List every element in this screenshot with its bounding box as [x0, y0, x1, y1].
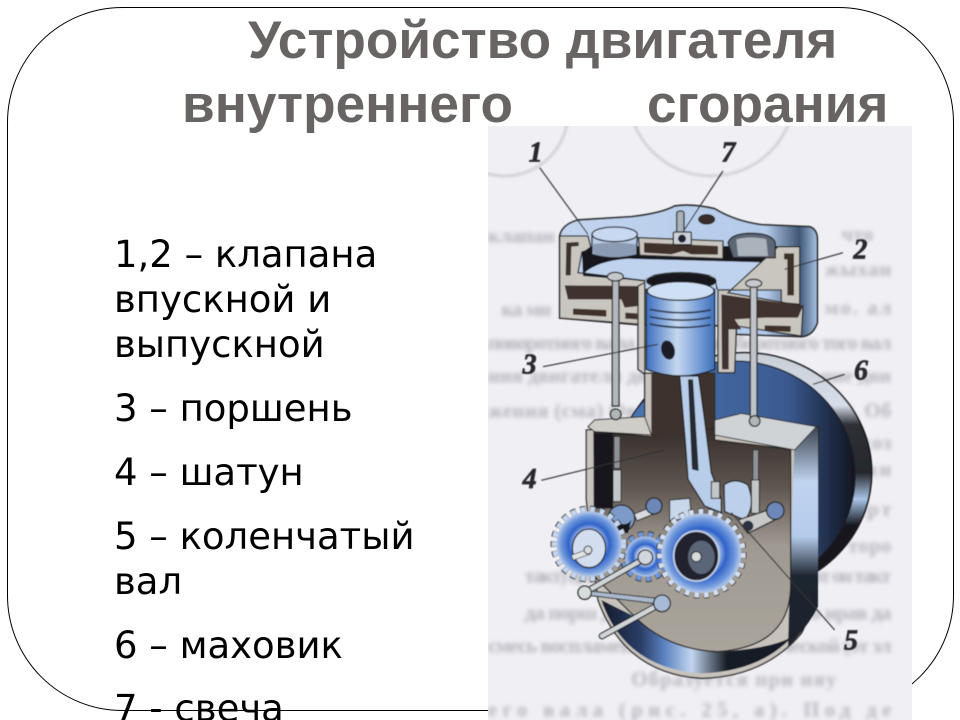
section: left wall — [560, 236, 645, 325]
legend item 5: вал — [114, 560, 182, 603]
section: right wall — [718, 247, 803, 373]
legend list — [114, 233, 414, 720]
legend item 4: 4 – шатун — [114, 451, 304, 494]
cylinder bore — [638, 273, 716, 374]
spark plug 7 — [673, 211, 715, 245]
tappet rods — [613, 437, 759, 513]
faint printed page text: такт) цикл двигателя рабочий ход руют он такт — [525, 566, 891, 588]
legend item 6: 6 – маховик — [114, 624, 343, 667]
valve 1 — [592, 227, 637, 258]
faint printed page text: клапан — [488, 226, 555, 248]
leader lines — [540, 168, 845, 630]
valve gear levers — [578, 550, 670, 636]
faint printed page text: смесь воспламеняется (от электрической (от эл — [488, 636, 892, 658]
faint printed page text: ка мн — [501, 299, 551, 321]
faint printed page text: оени — [841, 459, 891, 481]
left gear — [554, 509, 624, 579]
connecting rod — [680, 376, 721, 513]
title — [182, 11, 888, 134]
paper background — [488, 126, 912, 720]
legend item 1,2: выпускной — [114, 323, 325, 366]
part numbers: 5 — [844, 625, 858, 656]
faint printed page text — [488, 224, 892, 720]
part numbers: 7 — [721, 138, 736, 169]
part numbers: 3 — [522, 350, 537, 381]
title word: внутреннего: внутреннего — [182, 75, 513, 134]
camshaft lobes — [608, 482, 720, 533]
part numbers: 1 — [529, 137, 543, 168]
part numbers: 2 — [852, 235, 867, 266]
legend item 1,2: 1,2 – клапана — [114, 233, 377, 276]
crankcase — [586, 373, 819, 678]
cylinder head — [560, 205, 817, 373]
right gear — [660, 512, 743, 595]
legend item 5: 5 – коленчатый — [114, 515, 414, 558]
valve stems — [607, 272, 762, 426]
faint printed page text: Образуется при няу — [631, 669, 837, 691]
center channel — [639, 238, 723, 259]
combustion chamber — [582, 246, 781, 289]
faint printed page text: ре соз — [835, 432, 891, 454]
faint printed page text: рерт — [841, 499, 891, 521]
faint printed page text: мо. ал — [825, 297, 892, 319]
faint printed page text: жыхан — [825, 259, 891, 281]
title word: сгорания: сгорания — [647, 75, 888, 134]
flywheel — [614, 353, 872, 593]
crank — [724, 481, 784, 533]
part numbers — [522, 137, 868, 656]
faint circles showing through — [441, 9, 795, 176]
faint printed page text: поворотного вала двигателя оборотного того вал — [488, 332, 892, 354]
faint printed page text: да порш двигается поршня вниз о нрав да — [525, 602, 892, 624]
mechanism of lower case — [554, 437, 784, 636]
small gear — [623, 535, 667, 579]
faint printed page text: жения (сма) Ов поршень движения а). Об — [488, 401, 891, 423]
legend item 1,2: впускной и — [114, 278, 331, 321]
engine illustration — [488, 126, 912, 720]
valve 2 — [728, 233, 775, 258]
part numbers: 6 — [854, 355, 868, 386]
faint printed page text: ния двигателя движение двигателя ние дви — [488, 366, 891, 388]
faint printed page text: торо — [848, 536, 891, 558]
title line 1: Устройство двигателя — [248, 11, 837, 70]
legend item 3: 3 – поршень — [114, 387, 352, 430]
piston — [646, 282, 715, 376]
part numbers: 4 — [522, 464, 537, 495]
legend item 1,2 — [114, 233, 377, 366]
faint printed page text: что — [841, 224, 873, 246]
engine drawing — [522, 137, 872, 678]
legend item 5 — [114, 515, 414, 603]
